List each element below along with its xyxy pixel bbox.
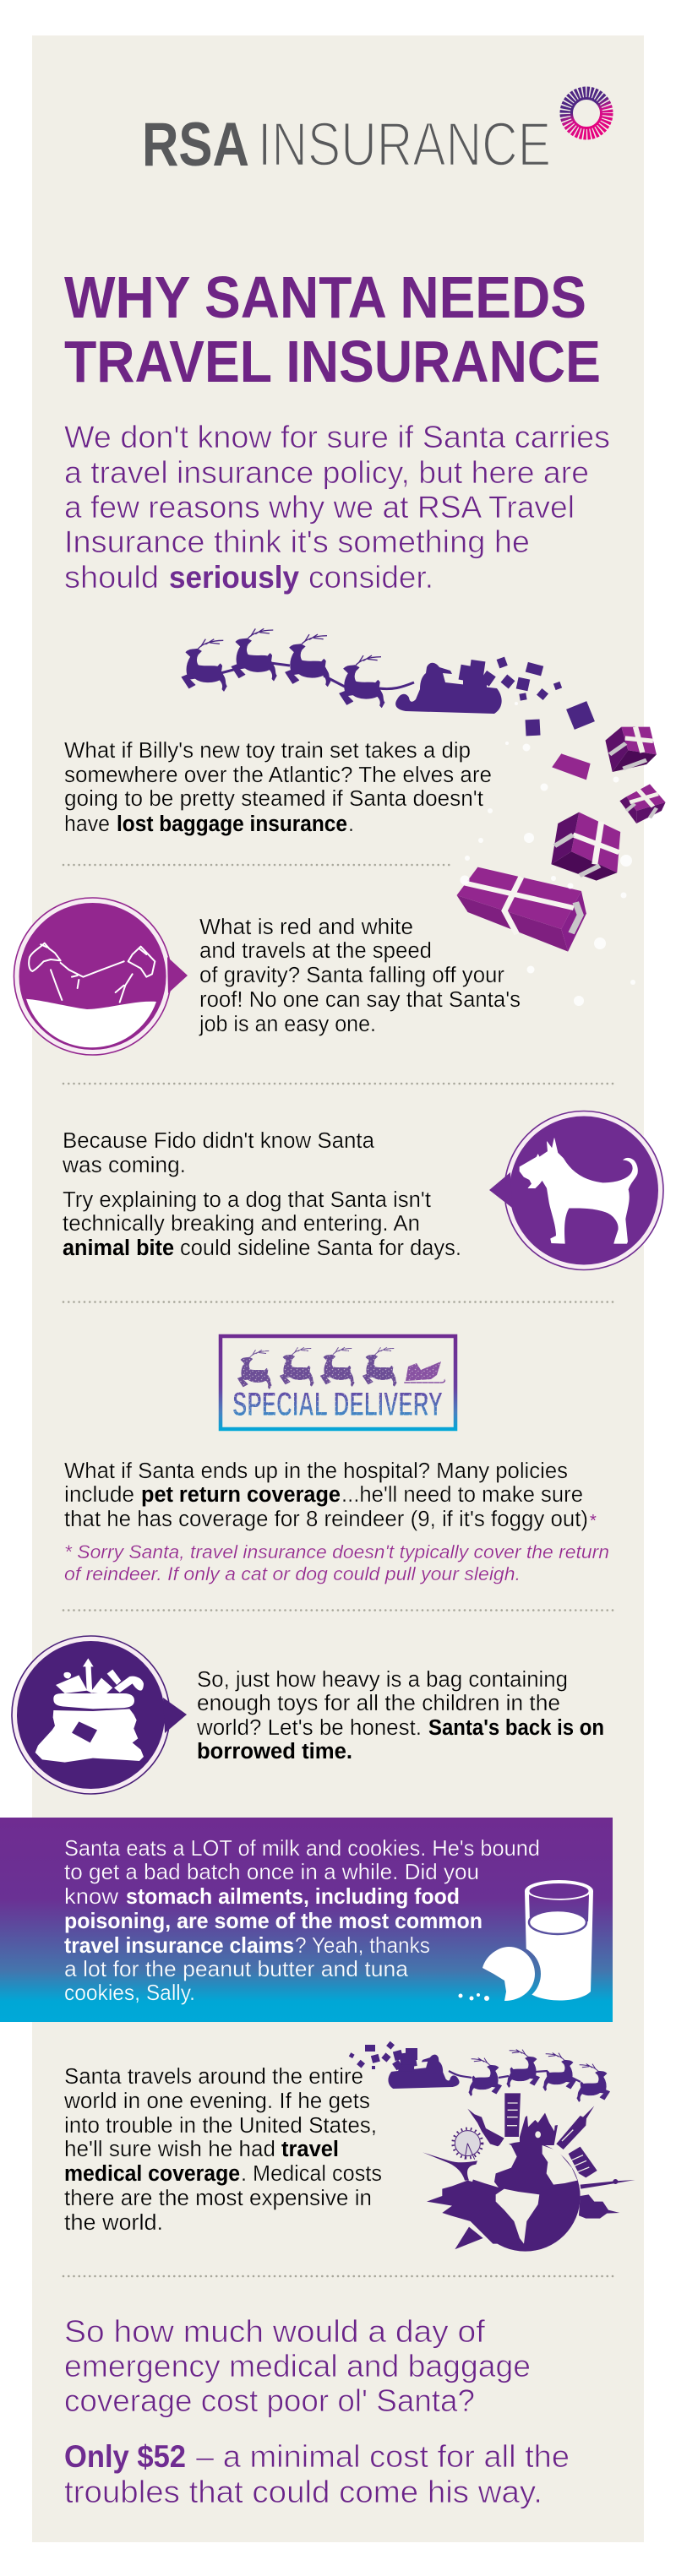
text: pet return coverage: pet return coverage: [141, 1483, 341, 1507]
text: travel medical coverage: into trouble in the United States,: [64, 2114, 377, 2138]
gift C: [551, 812, 620, 881]
illustration: globe with landmarks: [422, 2093, 635, 2252]
text: lost baggage: have: [64, 812, 110, 836]
band text: a lot for the peanut butter and tuna: [64, 1956, 409, 1981]
text: animal bite: Try explaining to a dog that Santa isn't: [63, 1188, 431, 1212]
text: heavy bag: Santa's back is on: [428, 1716, 604, 1740]
closing answer: Only $52: [64, 2439, 186, 2474]
gift D: [457, 867, 586, 952]
closing question: [64, 2314, 531, 2418]
text: animal bite: was coming.: [62, 1154, 186, 1177]
closing question: So how much would a day of: [64, 2314, 486, 2349]
text: travel medical coverage: Santa travels around the entire: [64, 2065, 363, 2089]
text: falling off roof: job is an easy one.: [199, 1013, 376, 1036]
text: travel medical coverage: there are the most expensive in: [64, 2187, 372, 2210]
closing question: emergency medical and baggage: [64, 2349, 531, 2383]
text: heavy bag: enough toys for all the children in the: [197, 1692, 560, 1715]
text: heavy bag: world? Let's be honest.: [196, 1716, 422, 1740]
falling small boxes: [497, 657, 595, 736]
title: TRAVEL INSURANCE: [64, 329, 601, 394]
text: lost baggage: going to be pretty steamed if Santa doesn't: [64, 787, 483, 811]
footnote: [64, 1541, 609, 1584]
icon: bitten cookie: [458, 1945, 541, 2006]
logo: RSA Insurance: INSURANCE: [258, 111, 551, 179]
band text: stomach ailments, including food: [126, 1883, 460, 1909]
band text: poisoning, are some of the most common: [64, 1908, 482, 1933]
icon: glass of milk: [525, 1880, 593, 2000]
text: animal bite: animal bite: [63, 1236, 174, 1260]
text: travel medical coverage: [63, 2065, 382, 2235]
title: [64, 264, 601, 394]
text: lost baggage: lost baggage insurance: [117, 812, 347, 836]
icon: toy sack: [12, 1636, 187, 1794]
illustration: Santa's sleigh and reindeer: [182, 628, 502, 714]
text: lost baggage: What if Billy's new toy train set takes a dip: [64, 739, 471, 763]
text: travel medical coverage: . Medical costs: [241, 2162, 382, 2186]
intro text: consider.: [308, 560, 433, 595]
text: falling off roof: [199, 916, 521, 1036]
text: pet return coverage: include: [64, 1483, 134, 1507]
text: heavy bag: [196, 1668, 604, 1764]
closing answer: troubles that could come his way.: [64, 2475, 542, 2509]
logo: RSA Insurance: RSA: [142, 111, 249, 179]
icon: Santa's legs falling: [14, 898, 188, 1055]
band text: ? Yeah, thanks: [295, 1932, 430, 1958]
text: travel medical coverage: world in one evening. If he gets: [63, 2090, 370, 2113]
illustration: sleigh flying right: [349, 2041, 610, 2102]
text: falling off roof: of gravity? Santa falling off your: [199, 964, 505, 987]
band text: cookies, Sally.: [64, 1980, 195, 2005]
text: travel medical coverage: the world.: [64, 2211, 163, 2235]
intro text: a few reasons why we at RSA Travel: [64, 490, 575, 524]
text: falling off roof: and travels at the speed: [199, 939, 432, 963]
closing answer: – a minimal cost for all the: [196, 2439, 570, 2474]
text: animal bite: [62, 1129, 461, 1260]
band text: [64, 1835, 540, 2005]
text: pet return coverage: *: [590, 1512, 597, 1530]
logo: RSA Insurance: [142, 93, 607, 179]
intro text: We don't know for sure if Santa carries: [64, 420, 610, 454]
icon: dog: [489, 1111, 663, 1270]
gift B: [619, 784, 666, 823]
text: pet return coverage: ...he'll need to make sure: [341, 1483, 583, 1507]
gift A: [605, 727, 657, 772]
falling gifts: [457, 727, 666, 952]
closing question: coverage cost poor ol' Santa?: [64, 2383, 475, 2418]
stamp: special delivery: [221, 1336, 455, 1429]
intro text: should: [64, 560, 159, 595]
text: travel medical coverage: travel: [281, 2138, 339, 2161]
band text: Santa eats a LOT of milk and cookies. He's bound: [64, 1835, 540, 1861]
text: pet return coverage: that he has coverage for 8 reindeer (9, if it's foggy out): [64, 1508, 588, 1531]
title: WHY SANTA NEEDS: [64, 264, 586, 330]
text: animal bite: Because Fido didn't know Santa: [63, 1129, 375, 1153]
band: milk and cookies: [0, 1818, 613, 2022]
text: lost baggage: .: [348, 812, 354, 836]
text: travel medical coverage: medical coverage: [64, 2162, 240, 2186]
text: animal bite: technically breaking and entering. An: [63, 1212, 420, 1236]
intro text: a travel insurance policy, but here are: [64, 455, 589, 490]
footnote: of reindeer. If only a cat or dog could pull your sleigh.: [64, 1563, 521, 1584]
text: heavy bag: So, just how heavy is a bag containing: [197, 1668, 568, 1692]
text: pet return coverage: [64, 1459, 597, 1531]
intro text: [64, 420, 610, 595]
footnote: * Sorry Santa, travel insurance doesn't typically cover the return: [64, 1541, 609, 1562]
band text: travel insurance claims: [64, 1932, 294, 1958]
text: falling off roof: roof! No one can say that Santa's: [199, 988, 521, 1012]
text: travel medical coverage: he'll sure wish he had: [64, 2138, 275, 2161]
text: pet return coverage: What if Santa ends up in the hospital? Many policies: [64, 1459, 568, 1483]
text: heavy bag: borrowed time.: [197, 1740, 352, 1764]
text: falling off roof: What is red and white: [199, 916, 413, 939]
band text: know: [64, 1883, 118, 1909]
text: lost baggage: somewhere over the Atlantic? The elves are: [64, 764, 492, 787]
text: lost baggage: [64, 739, 492, 836]
ferris wheel: [453, 2128, 482, 2160]
text: animal bite: could sideline Santa for days.: [180, 1236, 461, 1260]
intro text: seriously: [169, 560, 299, 595]
stamp: special delivery: SPECIAL DELIVERY: [232, 1386, 443, 1423]
band text: to get a bad batch once in a while. Did you: [64, 1859, 479, 1884]
snow: [460, 702, 635, 1006]
intro text: Insurance think it's something he: [64, 524, 530, 559]
closing answer: [64, 2439, 570, 2509]
